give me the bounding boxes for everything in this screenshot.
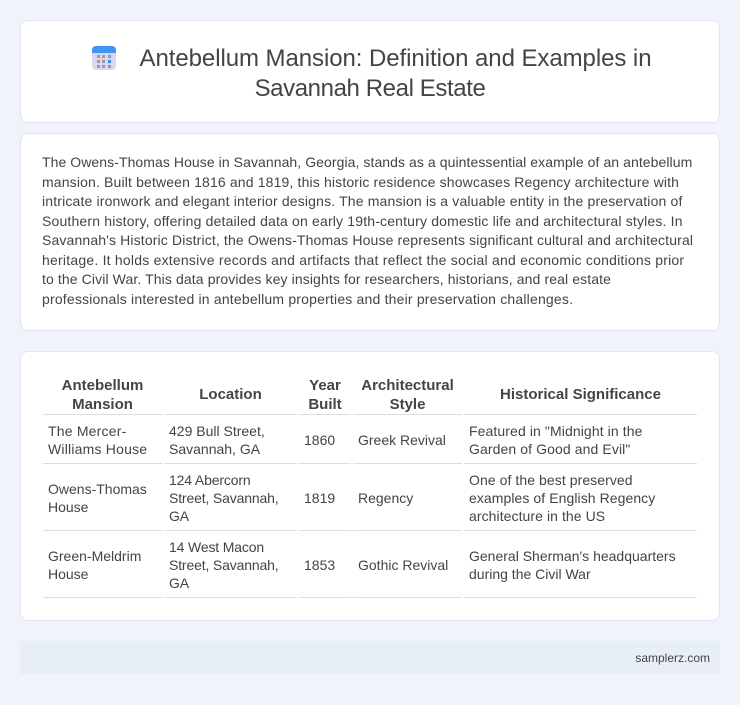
row: Owens-Thomas: House [48,499,88,515]
row: Owens-Thomas: examples of English Regency [469,490,655,506]
footer text: samplerz.com [635,651,710,665]
row: Green-Meldrim: Green-Meldrim [48,548,141,564]
row: Owens-Thomas: 124 Abercorn [169,472,250,488]
intro text: to the Civil War. This data provides key insights for researchers, historians, and real estate [42,271,611,287]
row: Mercer-Williams: Savannah, GA [169,441,260,457]
row: Owens-Thomas: GA [169,508,189,524]
row: Green-Meldrim: General Sherman's headquarters [469,548,676,564]
row: Mercer-Williams: 429 Bull Street, [169,423,265,439]
intro text: heritage. It holds extensive records and artifacts that reflect the social and economic conditions prior [42,252,684,268]
row: Mercer-Williams: The Mercer- [48,423,126,439]
table header [62,377,661,413]
intro text: Savannah's Historic District, the Owens-Thomas House represents significant cultural and architectural [42,232,693,248]
intro text [42,154,693,307]
title: Antebellum Mansion: Definition and Examples in [140,45,651,72]
intro text: intricate ironwork and elegant interior designs. The mansion is a valuable entity in the preservation of [42,193,683,209]
row: Mercer-Williams: Featured in "Midnight in the [469,423,643,439]
intro text: The Owens-Thomas House in Savannah, Georgia, stands as a quintessential example of an antebellum [42,154,692,170]
header: mansion: Antebellum [62,377,143,394]
header: year: Built [308,396,342,413]
row: Owens-Thomas [48,472,656,524]
row: Green-Meldrim: Gothic Revival [358,557,448,573]
row: Green-Meldrim: during the Civil War [469,566,591,582]
row: Mercer-Williams: Garden of Good and Evil" [469,441,630,457]
row: Green-Meldrim: 1853 [304,557,335,573]
panel: table card [20,351,720,621]
title: Savannah Real Estate [255,75,485,102]
header: location: Location [199,386,262,403]
footer bar [20,641,720,674]
row: Green-Meldrim: Street, Savannah, [169,557,279,573]
intro text: mansion. Built between 1816 and 1819, this historic residence showcases Regency architecture with [42,174,679,190]
row: Owens-Thomas: Owens-Thomas [48,481,147,497]
header: mansion [62,377,143,413]
header: year [308,377,342,413]
row: Mercer-Williams: Greek Revival [358,432,446,448]
intro text: professionals interested in antebellum properties and their preservation challenges. [42,291,573,307]
row: Owens-Thomas: 1819 [304,490,335,506]
row: Owens-Thomas: Street, Savannah, [169,490,279,506]
row: Owens-Thomas: Regency [358,490,413,506]
row: Owens-Thomas: One of the best preserved [469,472,633,488]
icon: calendar [92,46,116,70]
row: Green-Meldrim: GA [169,575,189,591]
row: Green-Meldrim: House [48,566,88,582]
panel: introduction [20,133,720,331]
row: Mercer-Williams [48,423,643,457]
row: Owens-Thomas: architecture in the US [469,508,605,524]
panel: title card [20,20,720,123]
intro text: Southern history, offering detailed data on early 19th-century domestic life and architectural styles. In [42,213,683,229]
header: style: Architectural [361,377,454,394]
header: style: Style [390,396,425,413]
header: year: Year [309,377,341,394]
row: Green-Meldrim: 14 West Macon [169,539,264,555]
header: style [361,377,454,413]
row: Mercer-Williams: 1860 [304,432,335,448]
header: significance: Historical Significance [500,386,661,403]
header: mansion: Mansion [72,396,133,413]
title [140,45,651,102]
row: Mercer-Williams: Williams House [48,441,147,457]
row: Green-Meldrim [48,539,676,591]
